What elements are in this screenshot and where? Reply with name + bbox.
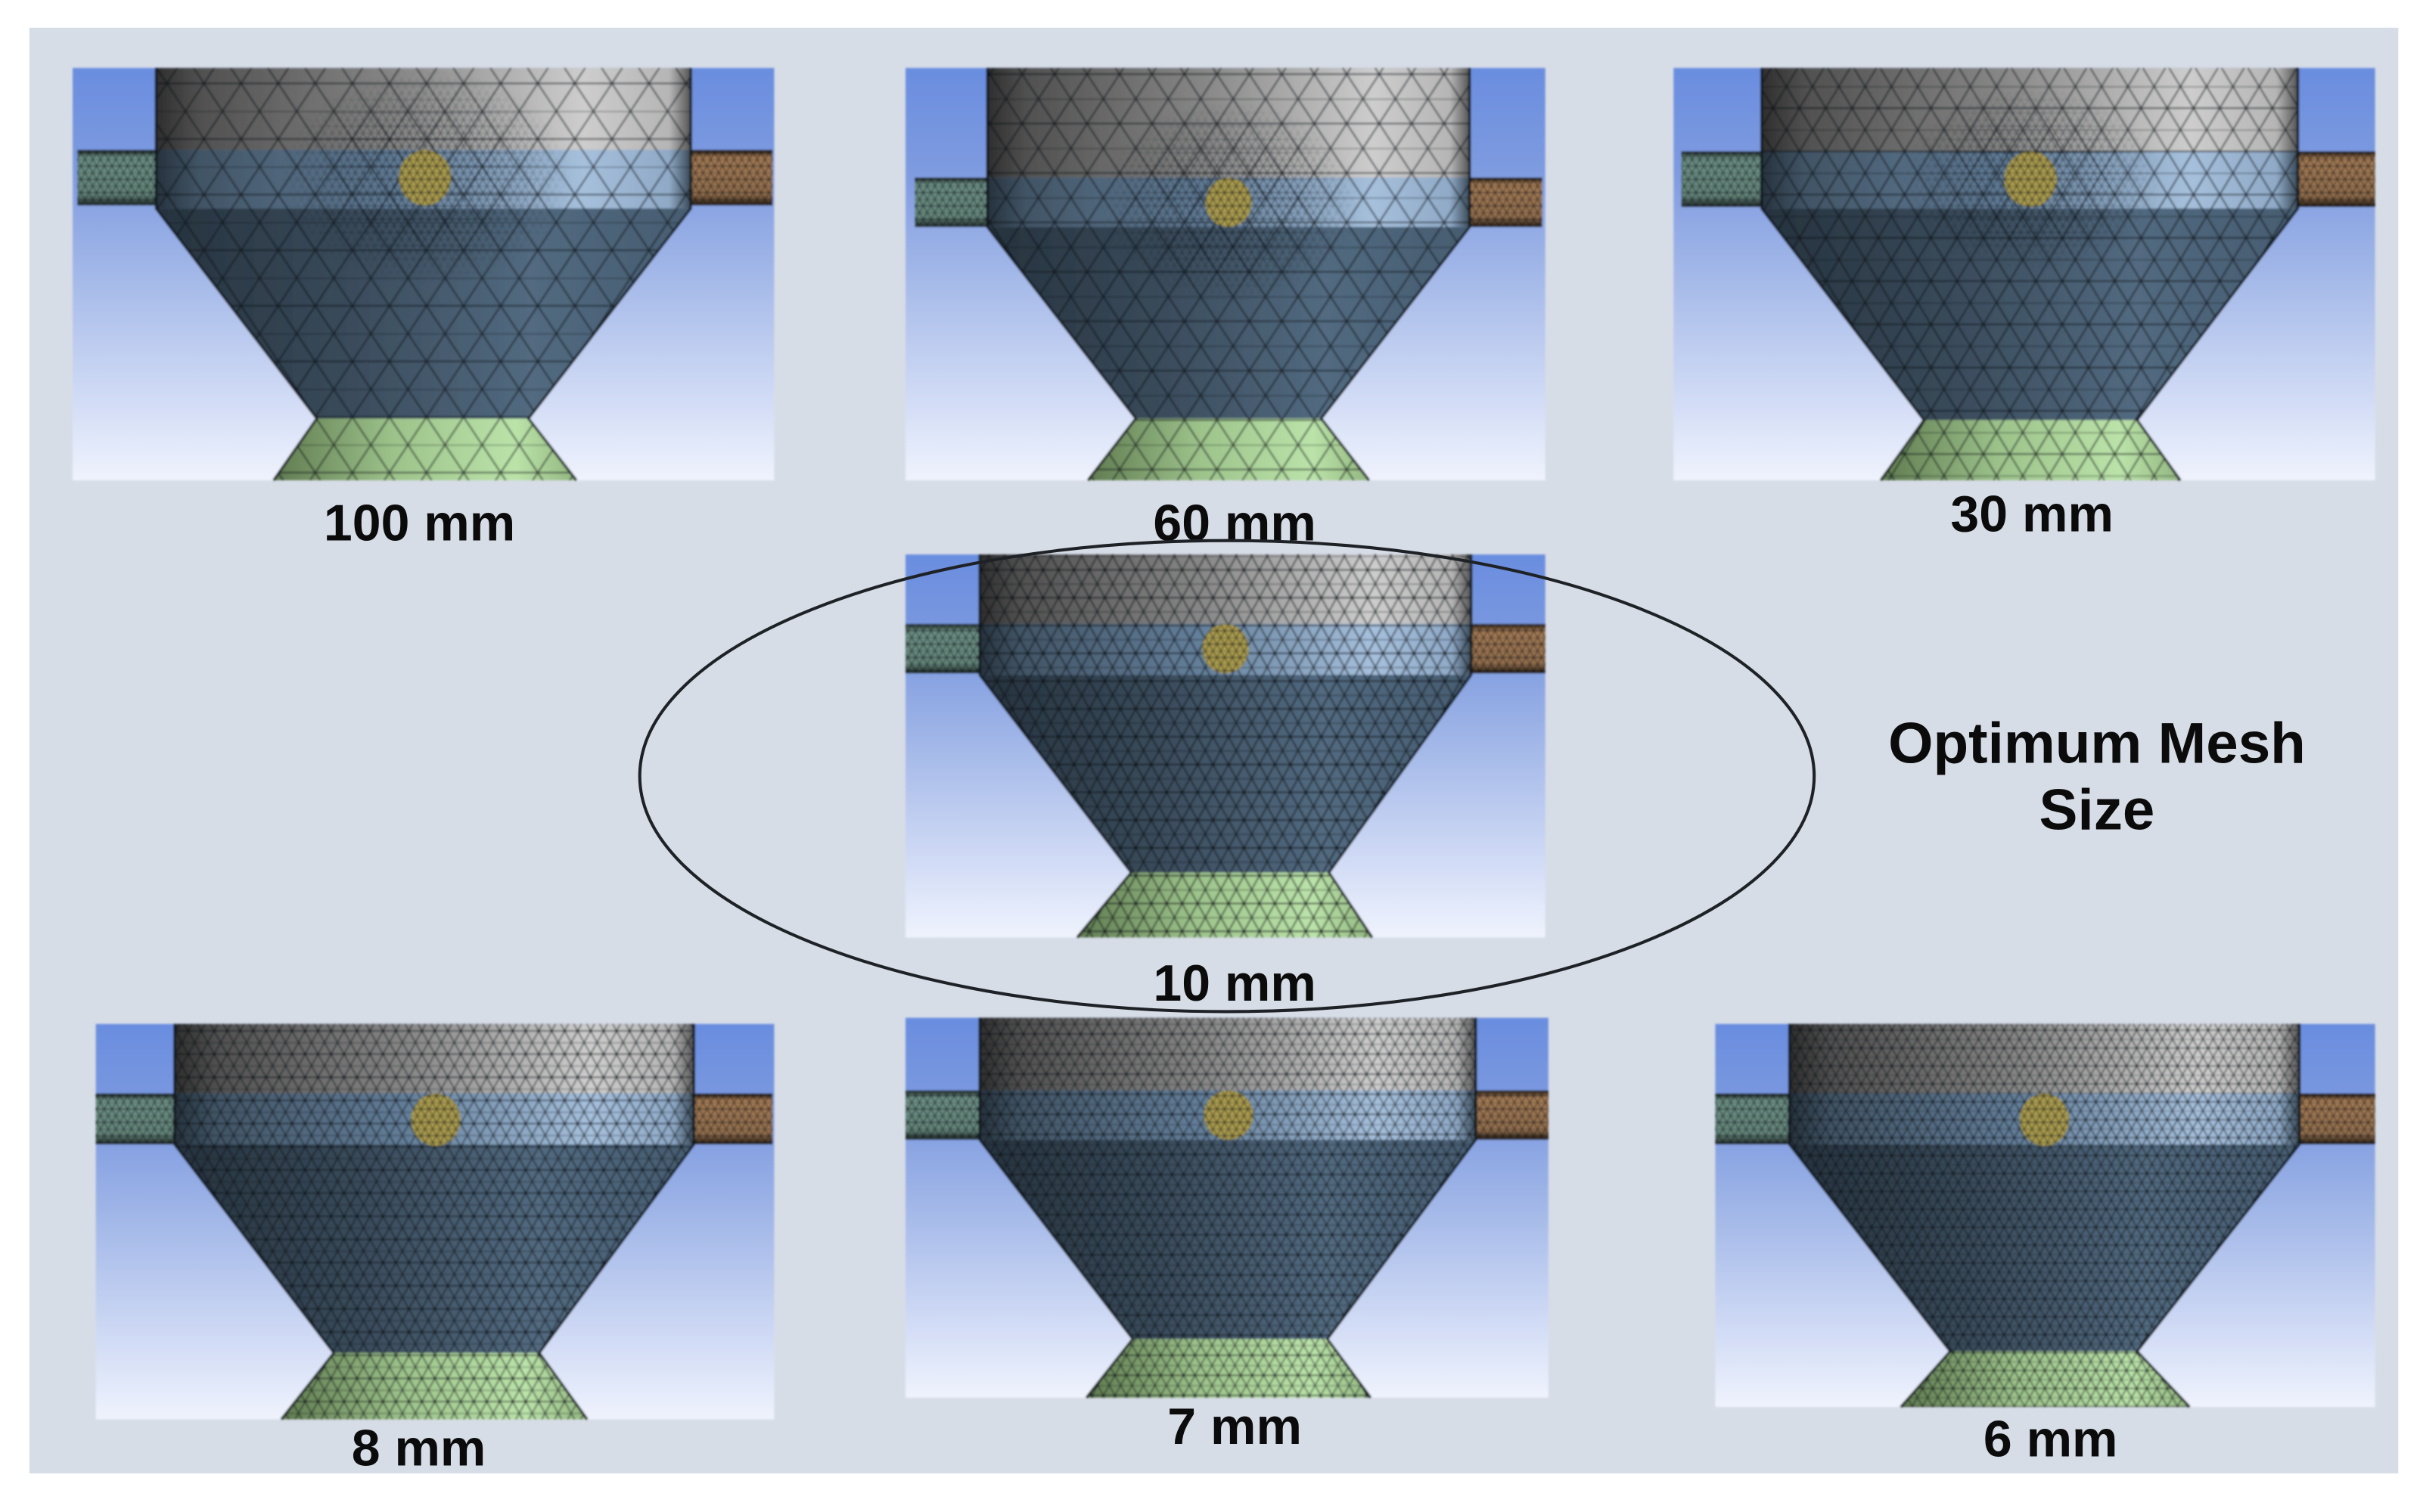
cone section <box>175 1144 694 1353</box>
right outlet pipe <box>689 150 772 206</box>
port mesh <box>399 150 451 206</box>
body side outline <box>1789 1024 2300 1407</box>
port mesh <box>1205 178 1252 227</box>
panel: 30 mm mesh <box>1673 68 2375 480</box>
triangular surface mesh <box>1789 1024 2300 1407</box>
label: 10 mm: 10 mm <box>1153 955 1316 1012</box>
pipe mesh <box>96 1094 772 1144</box>
port mesh <box>2020 1094 2069 1146</box>
cone section <box>1762 209 2298 420</box>
triangular surface mesh <box>1762 68 2298 480</box>
blue band <box>987 178 1470 227</box>
callout text: Optimum Mesh Size: Optimum Mesh <box>1888 712 2306 776</box>
body side outline <box>156 68 691 480</box>
right outlet pipe <box>2298 1094 2375 1144</box>
pipe mesh <box>1715 1094 2375 1144</box>
pipe mesh <box>906 1091 1549 1140</box>
callout: optimum ellipse <box>640 541 1814 1011</box>
upper cylinder <box>980 1018 1476 1091</box>
triangular surface mesh <box>175 1024 694 1419</box>
blue band <box>1762 151 2298 209</box>
green lower cone <box>1088 418 1369 480</box>
port mesh <box>2004 151 2057 207</box>
green lower cone <box>281 1353 587 1419</box>
yellow port <box>399 150 451 206</box>
upper cylinder <box>175 1024 694 1094</box>
blue band <box>156 150 691 209</box>
triangular surface mesh <box>980 554 1471 937</box>
cone section <box>980 675 1471 873</box>
triangular surface mesh <box>987 68 1470 480</box>
local mesh refinement <box>1912 98 2153 260</box>
left inlet pipe <box>1715 1094 1791 1144</box>
cone section <box>1789 1144 2300 1352</box>
port mesh <box>1202 624 1249 673</box>
yellow port <box>1202 624 1249 673</box>
green lower cone <box>274 418 576 480</box>
label: 6 mm: 6 mm <box>1983 1411 2118 1467</box>
local mesh refinement <box>297 79 561 274</box>
panel: 6 mm mesh <box>1715 1024 2375 1407</box>
green lower cone <box>1086 1339 1371 1398</box>
ellipse interior hiding label bottom <box>640 541 1814 1011</box>
panel: 7 mm mesh <box>906 1018 1549 1398</box>
blue band <box>175 1094 694 1144</box>
callout text: Optimum Mesh Size: Size <box>2039 778 2154 842</box>
background gradient <box>1715 1024 2375 1407</box>
body side outline <box>980 1018 1476 1398</box>
yellow port <box>1204 1091 1253 1140</box>
triangular surface mesh <box>980 1018 1476 1398</box>
blue band <box>980 1091 1476 1140</box>
upper cylinder <box>980 554 1471 624</box>
local mesh refinement <box>1112 111 1350 287</box>
yellow port <box>2004 151 2057 207</box>
left inlet pipe <box>915 178 989 227</box>
background gradient <box>906 1018 1549 1398</box>
body side outline <box>175 1024 694 1419</box>
triangular surface mesh <box>156 68 691 480</box>
upper cylinder <box>987 68 1470 178</box>
yellow port <box>2020 1094 2069 1146</box>
green lower cone <box>1077 873 1372 937</box>
background gradient <box>906 68 1545 480</box>
left inlet pipe <box>906 624 981 673</box>
left inlet pipe <box>906 1091 981 1140</box>
callout text: Optimum Mesh Size <box>1888 712 2306 842</box>
upper cylinder <box>1762 68 2298 151</box>
yellow port <box>1205 178 1252 227</box>
cone section <box>156 209 691 418</box>
panel: 10 mm mesh <box>906 554 1545 937</box>
left inlet pipe <box>96 1094 176 1144</box>
label: 8 mm: 8 mm <box>352 1420 486 1477</box>
label: 7 mm: 7 mm <box>1167 1398 1302 1455</box>
pipe mesh <box>77 150 772 206</box>
right outlet pipe <box>2296 151 2375 207</box>
blue band <box>980 624 1471 675</box>
port mesh <box>411 1094 461 1146</box>
panel: 8 mm mesh <box>96 1024 774 1419</box>
port mesh <box>1204 1091 1253 1140</box>
green lower cone <box>1881 420 2180 480</box>
right outlet pipe <box>1474 1091 1549 1140</box>
body side outline <box>980 554 1471 937</box>
body side outline <box>987 68 1470 480</box>
yellow port <box>411 1094 461 1146</box>
blue band <box>1789 1094 2300 1144</box>
background gradient <box>1673 68 2375 480</box>
right outlet pipe <box>1468 178 1542 227</box>
right outlet pipe <box>1470 624 1545 673</box>
panel: 100 mm mesh <box>73 68 774 480</box>
label: 100 mm: 100 mm <box>324 495 515 552</box>
label: 60 mm: 60 mm <box>1153 495 1316 552</box>
upper cylinder <box>1789 1024 2300 1094</box>
body side outline <box>1762 68 2298 480</box>
pipe mesh <box>906 624 1545 673</box>
cone section <box>980 1140 1476 1339</box>
left inlet pipe <box>1681 151 1763 207</box>
upper cylinder <box>156 68 691 150</box>
pipe mesh <box>915 178 1542 227</box>
pipe mesh <box>1681 151 2375 207</box>
background gradient <box>73 68 774 480</box>
right outlet pipe <box>692 1094 772 1144</box>
background gradient <box>96 1024 774 1419</box>
label: 30 mm: 30 mm <box>1950 485 2114 542</box>
panel: 60 mm mesh <box>906 68 1545 480</box>
cone section <box>987 227 1470 418</box>
left inlet pipe <box>77 150 157 206</box>
background gradient <box>906 554 1545 937</box>
green lower cone <box>1901 1352 2190 1407</box>
